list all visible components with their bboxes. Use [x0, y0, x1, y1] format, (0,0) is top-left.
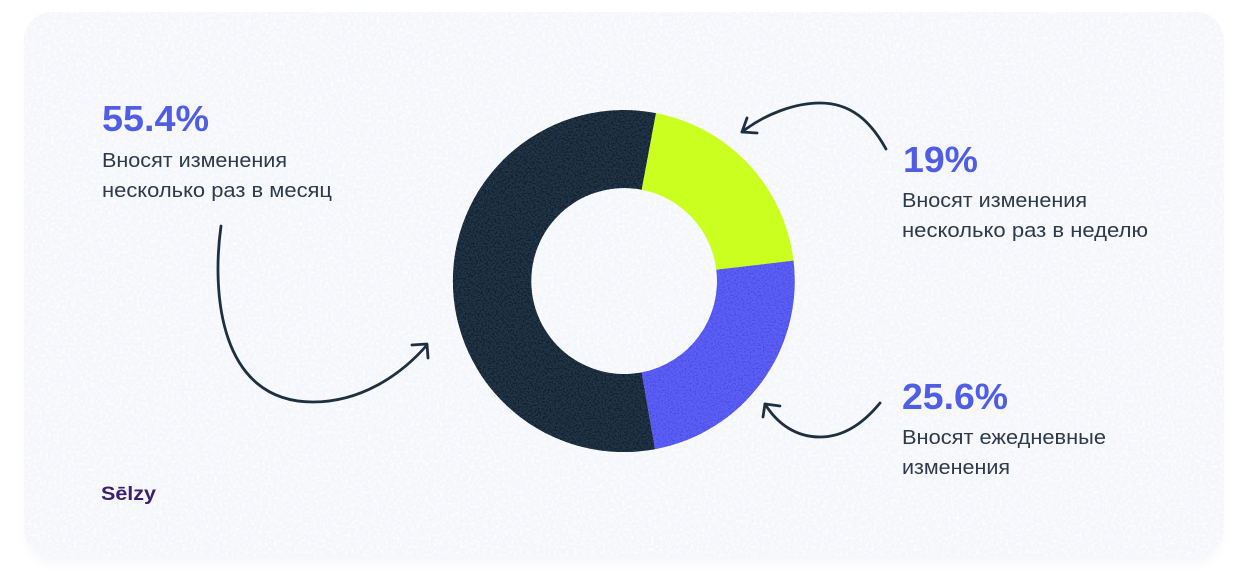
text block: 25.6%: изменения [902, 457, 1010, 479]
segment: 25.6% blue [642, 261, 795, 449]
segment: 19% lime [642, 113, 794, 270]
text block: 55.4% [102, 98, 332, 202]
logo: Selzy: Sēlzy [101, 484, 156, 505]
arrow: 25.6% to donut [763, 403, 880, 437]
donut chart [453, 110, 795, 452]
description: Вносят изменения [102, 150, 287, 172]
description: Вносят ежедневные [902, 427, 1106, 449]
value 25.6%: 25.6% [902, 376, 1008, 417]
text block: 25.6% [902, 376, 1106, 479]
arrow: 19% to donut [742, 103, 886, 149]
text block: 19%: несколько раз в неделю [902, 220, 1148, 242]
value 55.4%: 55.4% [102, 98, 209, 139]
segment: 55.4% dark [453, 110, 656, 452]
value 19%: 19% [903, 139, 978, 180]
arrow: 55.4% to donut [218, 226, 428, 402]
text block: 19% [902, 139, 1148, 242]
description: Вносят изменения [902, 190, 1087, 212]
text block: 55.4%: несколько раз в месяц [102, 180, 332, 202]
